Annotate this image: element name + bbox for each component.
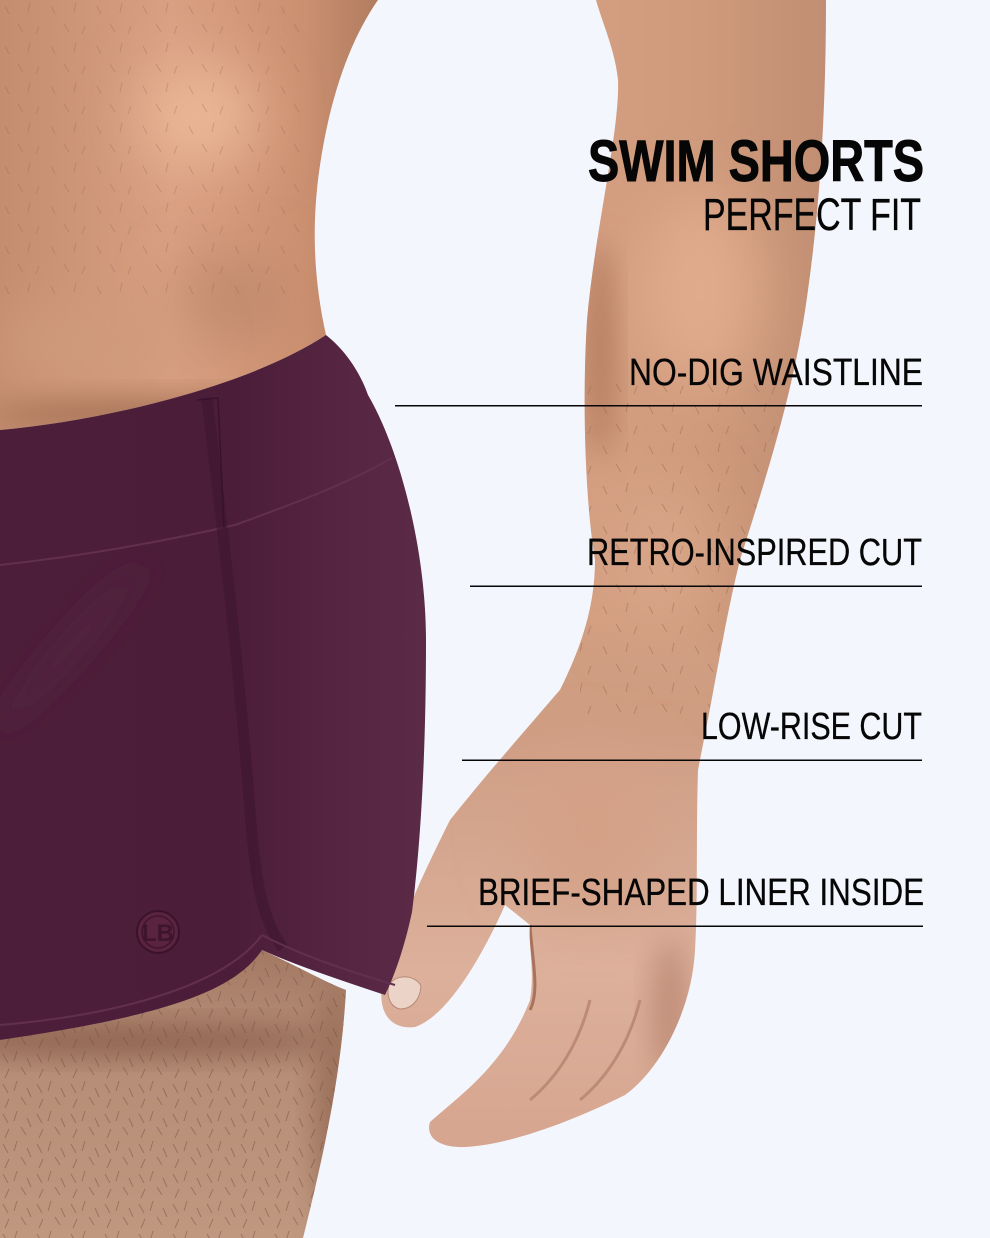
callout: no-dig waistline: NO-DIG WAISTLINE	[629, 352, 923, 394]
leg	[0, 940, 355, 1238]
logo badge	[137, 911, 179, 953]
side seam	[207, 398, 283, 948]
hem	[0, 935, 395, 1025]
callout: low-rise cut: LOW-RISE CUT	[701, 706, 922, 748]
callout: retro-inspired cut: RETRO-INSPIRED CUT	[587, 532, 922, 574]
waistband seam	[0, 458, 392, 565]
thumbnail	[388, 977, 421, 1009]
title	[588, 129, 924, 240]
torso	[0, 0, 380, 440]
subheading: perfect fit: PERFECT FIT	[703, 189, 921, 240]
logo badge: LB	[142, 920, 174, 947]
swim shorts	[0, 335, 426, 1040]
arm and hand	[370, 0, 840, 1160]
